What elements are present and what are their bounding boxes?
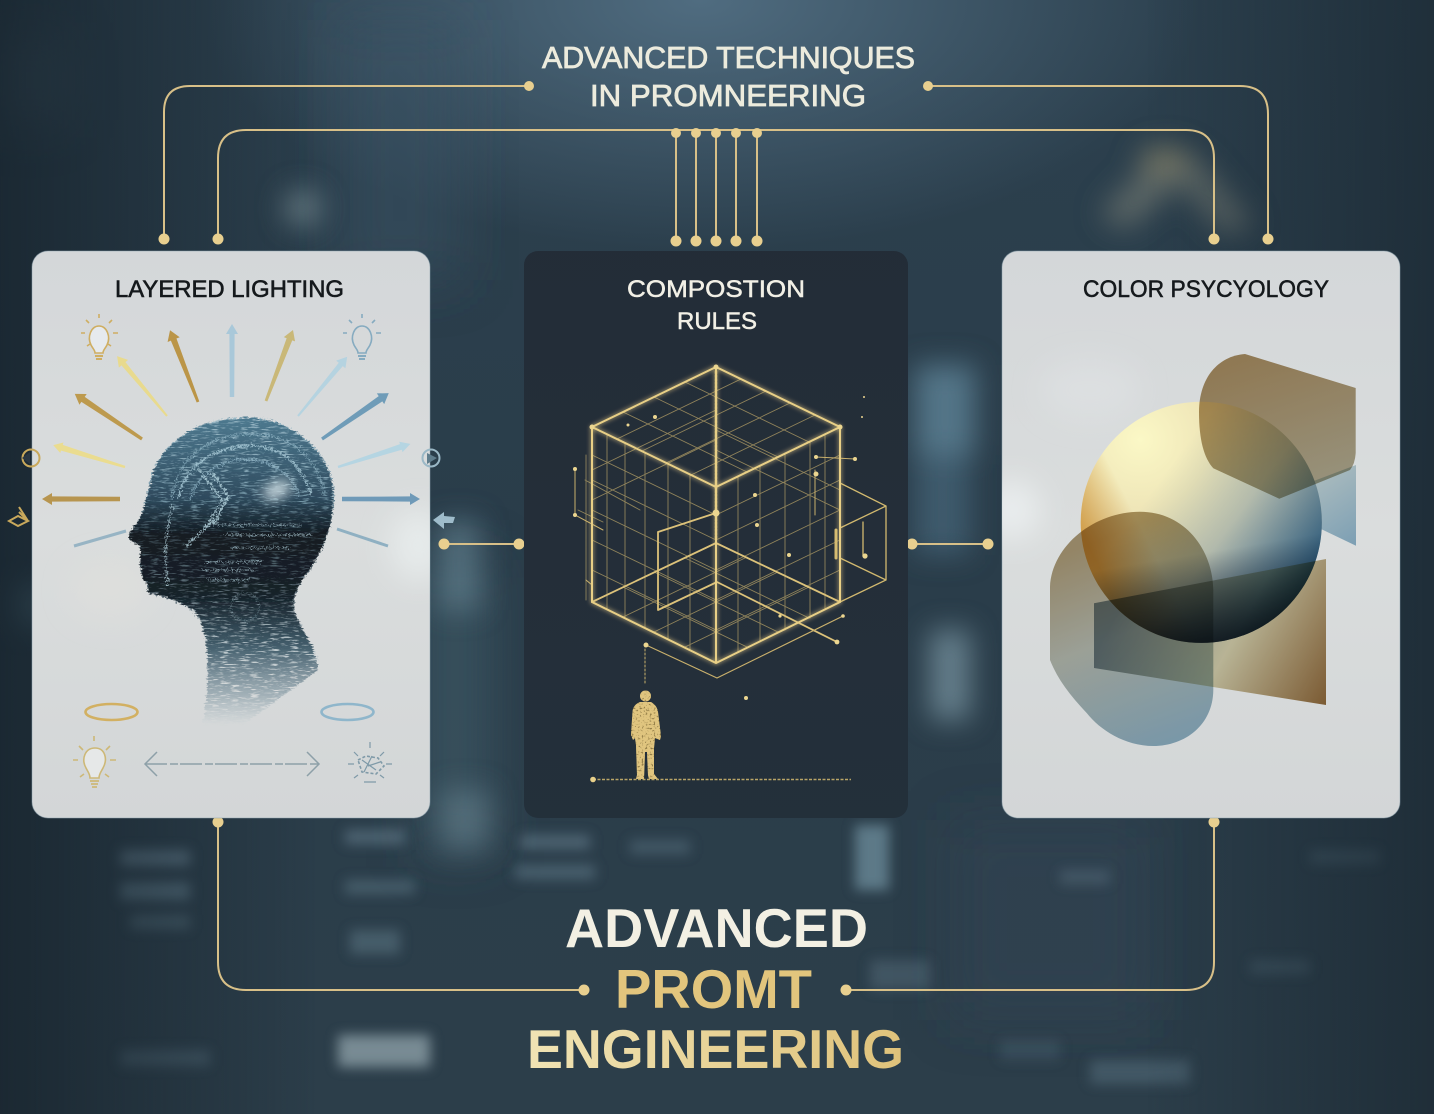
connector: top inner loop [218,130,1214,238]
panel title: COMPOSTION [627,276,805,303]
connector: bottom right [846,822,1214,990]
connector: top-left outer [164,86,528,238]
brown upper shape [1199,354,1356,499]
connector: five vertical lines [676,133,757,241]
cube fine grid [578,379,840,652]
main title: ADVANCED [565,897,868,959]
panel title: COLOR PSYCYOLOGY [1083,276,1329,303]
panel: color psychology [984,251,1400,818]
cube central dotted column [714,372,718,540]
cube main edges [592,367,840,663]
cube inner frame [658,513,837,642]
translucent lower blob [1050,512,1213,746]
connector: bottom left [218,822,584,990]
gradient sphere [1081,402,1322,643]
main title: ENGINEERING [527,1018,904,1080]
cube lower offset frame [646,616,843,678]
icon: double-headed arrow [145,752,319,776]
panel light mottling [395,505,430,584]
connector dots [158,81,1274,996]
top heading: IN PROMNEERING [590,78,866,113]
halo ring blue [322,704,374,720]
icon: scattered bulb bottom-right [348,742,392,782]
panel title: LAYERED LIGHTING [115,276,344,303]
top heading: ADVANCED TECHNIQUES [542,40,915,75]
icon: gold side arrow [9,507,28,526]
main title: PROMT [615,958,812,1020]
connector: left panel to centre [444,543,519,545]
main title [527,897,904,1080]
icon: gold bulb top-left [81,314,118,359]
human figure [631,690,661,779]
panel: composition rules [524,251,908,818]
wireframe cube [573,364,886,700]
icon: gold eye left [22,450,40,466]
top heading [542,40,915,113]
head brain lines [165,434,324,621]
cube nodes [573,364,868,700]
icon: blue eye right [422,450,440,466]
pale blue wedge [1290,465,1356,546]
translucent quadrilateral [1094,559,1326,705]
head highlight [260,476,294,504]
icon: bulb bottom-left [73,736,116,787]
icon: blue bulb top-right [343,314,381,359]
cube side ticks [575,457,855,585]
icon: blue side arrow [433,512,455,529]
halo ring gold [86,704,138,720]
cube extension box [840,483,886,602]
ground line [590,777,851,782]
panel: layered lighting [9,251,455,818]
cube back floor edges [592,543,840,602]
connector lines frame [164,86,1268,990]
connector: top-right outer [928,86,1268,238]
light ray arrows [42,324,420,546]
abstract overlapping shapes [1050,354,1356,746]
panel title: RULES [677,308,757,335]
panel light mottling [1002,472,1038,548]
connector: centre to right panel [912,543,988,545]
panel title [627,276,805,335]
head silhouette [129,418,333,725]
